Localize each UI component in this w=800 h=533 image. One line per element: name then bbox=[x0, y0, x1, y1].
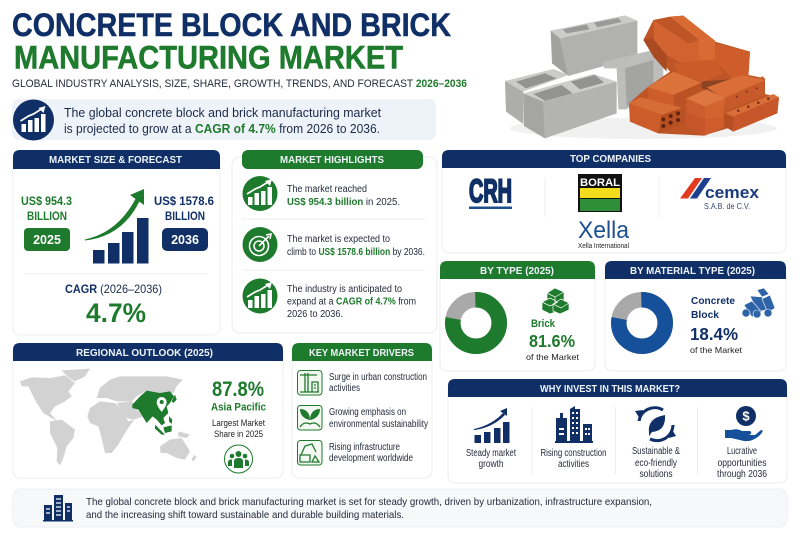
highlight 1 bbox=[242, 176, 400, 211]
panel: top companies bbox=[442, 150, 786, 253]
panel: key market drivers bbox=[292, 343, 432, 478]
regional share text: Asia Pacific bbox=[211, 402, 266, 414]
reason: sustainable: Sustainable & bbox=[632, 446, 680, 457]
concrete block share text: 18.4% bbox=[690, 324, 738, 344]
driver 2: environmental sustainability bbox=[329, 419, 428, 430]
footer text bbox=[86, 496, 652, 521]
regional share text: Share in 2025 bbox=[214, 429, 263, 440]
subtitle: GLOBAL INDUSTRY ANALYSIS, SIZE, SHARE, GROWTH, TRENDS, AND FORECAST 2026–2036 bbox=[12, 78, 467, 90]
reason: lucrative: through 2036 bbox=[717, 469, 767, 480]
logo: Boral bbox=[578, 174, 622, 212]
title: MANUFACTURING MARKET bbox=[14, 40, 403, 76]
reason: steady growth: growth bbox=[478, 459, 504, 470]
value 2036: BILLION bbox=[165, 211, 205, 223]
reason: sustainable bbox=[632, 408, 680, 480]
brick share text bbox=[526, 318, 580, 362]
panel: regional outlook: REGIONAL OUTLOOK (2025) bbox=[76, 347, 213, 359]
driver 1 bbox=[298, 370, 427, 395]
logo: Xella: Xella International bbox=[578, 243, 629, 250]
icon: people group bbox=[224, 445, 252, 473]
regional share text: Largest Market bbox=[212, 418, 265, 429]
reason: steady growth: Steady market bbox=[466, 448, 516, 459]
summary text: The global concrete block and brick manufacturing market bbox=[64, 105, 381, 120]
reason: lucrative: Lucrative bbox=[727, 446, 757, 457]
reason: lucrative: $ bbox=[742, 408, 750, 424]
summary banner bbox=[12, 99, 436, 140]
world map bbox=[20, 369, 197, 465]
value 2036: 2036 bbox=[171, 233, 199, 247]
bar chart with growth arrow bbox=[85, 189, 148, 264]
logo: CRH: CRH bbox=[469, 173, 512, 209]
icon: growth chart badge bbox=[13, 100, 54, 140]
panel: top companies: TOP COMPANIES bbox=[570, 153, 651, 165]
title: CONCRETE BLOCK AND BRICK bbox=[12, 7, 451, 43]
icon: city buildings bbox=[43, 495, 73, 522]
summary text bbox=[64, 105, 381, 136]
logo: Cemex bbox=[680, 178, 760, 211]
CAGR bbox=[65, 282, 162, 328]
brick share text: Brick bbox=[531, 318, 556, 330]
highlight 3 bbox=[242, 278, 416, 320]
reason: lucrative bbox=[717, 406, 767, 480]
brick share text: 81.6% bbox=[529, 331, 575, 351]
highlight 3: 2026 to 2036. bbox=[287, 309, 343, 320]
concrete block share text: Block bbox=[691, 309, 719, 321]
driver 2 bbox=[298, 406, 428, 430]
reason: steady growth bbox=[466, 408, 516, 470]
highlight 1: The market reached bbox=[287, 184, 367, 195]
illustration: concrete blocks and bricks bbox=[505, 15, 779, 139]
icon: stacked bricks bbox=[542, 288, 569, 314]
regional share text: 87.8% bbox=[212, 378, 264, 401]
footer text: The global concrete block and brick manufacturing market is set for steady growth, driven by urbanization, infrastructure expansion, bbox=[86, 496, 652, 508]
icon: location pin bbox=[157, 397, 167, 412]
logo: Xella: Xella bbox=[578, 217, 630, 244]
highlight 2: The market is expected to bbox=[287, 234, 390, 245]
panel: market highlights bbox=[232, 150, 437, 333]
reason: rising construction: Rising construction bbox=[540, 448, 606, 459]
donut chart: concrete block share bbox=[619, 300, 665, 346]
driver 1: activities bbox=[329, 383, 360, 394]
logo: Cemex: cemex bbox=[705, 183, 760, 202]
logo: Boral: BORAL bbox=[580, 177, 620, 189]
title bbox=[12, 7, 451, 76]
panel: why invest: WHY INVEST IN THIS MARKET? bbox=[540, 383, 680, 395]
highlight 3: expand at a CAGR of 4.7% from bbox=[287, 296, 416, 308]
footer banner bbox=[13, 489, 787, 527]
logo: CRH bbox=[469, 173, 512, 209]
panel: why invest bbox=[448, 379, 787, 483]
panel: market size and forecast: MARKET SIZE & FORECAST bbox=[49, 154, 183, 166]
summary text: is projected to grow at a CAGR of 4.7% from 2026 to 2036. bbox=[64, 121, 380, 136]
driver 3: Rising infrastructure bbox=[329, 442, 400, 453]
regional share text bbox=[211, 378, 266, 440]
concrete block share text: of the Market bbox=[690, 345, 743, 355]
reason: rising construction bbox=[540, 406, 606, 470]
value 2025: US$ 954.3 bbox=[21, 196, 72, 208]
panel: by material type: BY MATERIAL TYPE (2025) bbox=[630, 265, 755, 277]
panel: by type: BY TYPE (2025) bbox=[480, 265, 554, 277]
panel: market highlights: MARKET HIGHLIGHTS bbox=[280, 154, 384, 166]
panel: by material type bbox=[605, 261, 786, 371]
highlight 2: climb to US$ 1578.6 billion by 2036. bbox=[287, 247, 425, 258]
concrete block share text bbox=[690, 295, 743, 355]
logo: Cemex: S.A.B. de C.V. bbox=[704, 202, 750, 211]
reason: rising construction: activities bbox=[558, 459, 589, 470]
brick share text: of the Market bbox=[526, 352, 580, 362]
panel: key market drivers: KEY MARKET DRIVERS bbox=[309, 347, 414, 359]
value 2025: BILLION bbox=[27, 211, 67, 223]
value 2025 bbox=[21, 196, 72, 251]
reason: sustainable: solutions bbox=[640, 469, 672, 480]
reason: sustainable: eco-friendly bbox=[635, 458, 677, 469]
concrete block share text: Concrete bbox=[691, 295, 735, 307]
donut chart: brick share bbox=[453, 300, 499, 346]
icon: concrete block stack bbox=[742, 288, 775, 318]
reason: lucrative: opportunities bbox=[718, 458, 766, 469]
panel: regional outlook bbox=[13, 343, 283, 478]
driver 3 bbox=[298, 440, 413, 465]
value 2036: US$ 1578.6 bbox=[154, 196, 214, 208]
driver 2: Growing emphasis on bbox=[329, 407, 406, 418]
value 2036 bbox=[154, 196, 214, 251]
highlight 3: The industry is anticipated to bbox=[287, 284, 402, 295]
CAGR: CAGR (2026–2036) bbox=[65, 282, 162, 296]
footer text: and the increasing shift toward sustainable and durable building materials. bbox=[86, 509, 404, 521]
highlight 2 bbox=[242, 227, 425, 262]
driver 3: development worldwide bbox=[329, 453, 413, 464]
highlight 1: US$ 954.3 billion in 2025. bbox=[287, 197, 400, 208]
driver 1: Surge in urban construction bbox=[329, 372, 427, 383]
value 2025: 2025 bbox=[33, 233, 61, 247]
CAGR: 4.7% bbox=[86, 298, 146, 328]
panel: by type bbox=[440, 261, 595, 371]
panel: market size and forecast bbox=[13, 150, 220, 335]
